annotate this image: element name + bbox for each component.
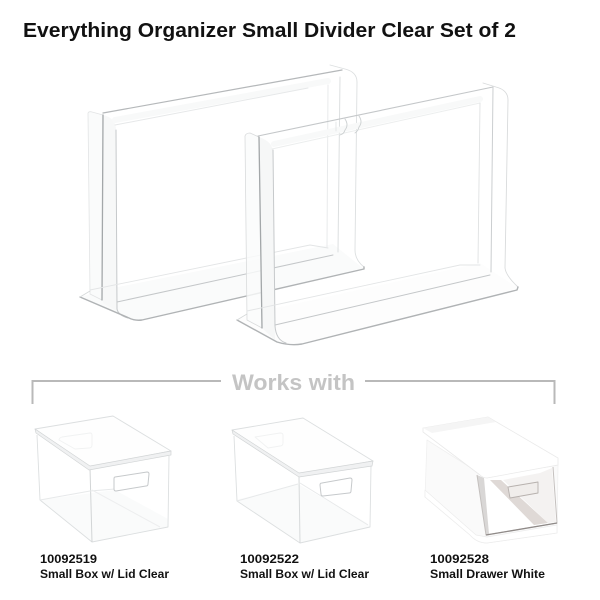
product: front divider [237, 83, 518, 345]
label: 10092528: Small Drawer White [430, 569, 545, 581]
product: back divider [80, 65, 364, 320]
product: small box 10092519 [35, 416, 171, 542]
label: 10092519: Small Box w/ Lid Clear [40, 569, 170, 581]
label: 10092522 [240, 554, 370, 581]
product: small box 10092522 [232, 418, 373, 543]
label: 10092528 [430, 554, 545, 581]
label: 10092528: 10092528 [430, 554, 490, 566]
heading: works with bracket: Works with [232, 370, 355, 395]
product: small drawer white [423, 417, 558, 543]
label: 10092522: Small Box w/ Lid Clear [240, 569, 370, 581]
label: 10092522: 10092522 [240, 554, 299, 566]
label: 10092519: 10092519 [40, 554, 97, 566]
label: 10092519 [40, 554, 170, 581]
heading: works with bracket [32, 370, 554, 404]
title: Everything Organizer Small Divider Clear Set of 2 [23, 19, 516, 42]
